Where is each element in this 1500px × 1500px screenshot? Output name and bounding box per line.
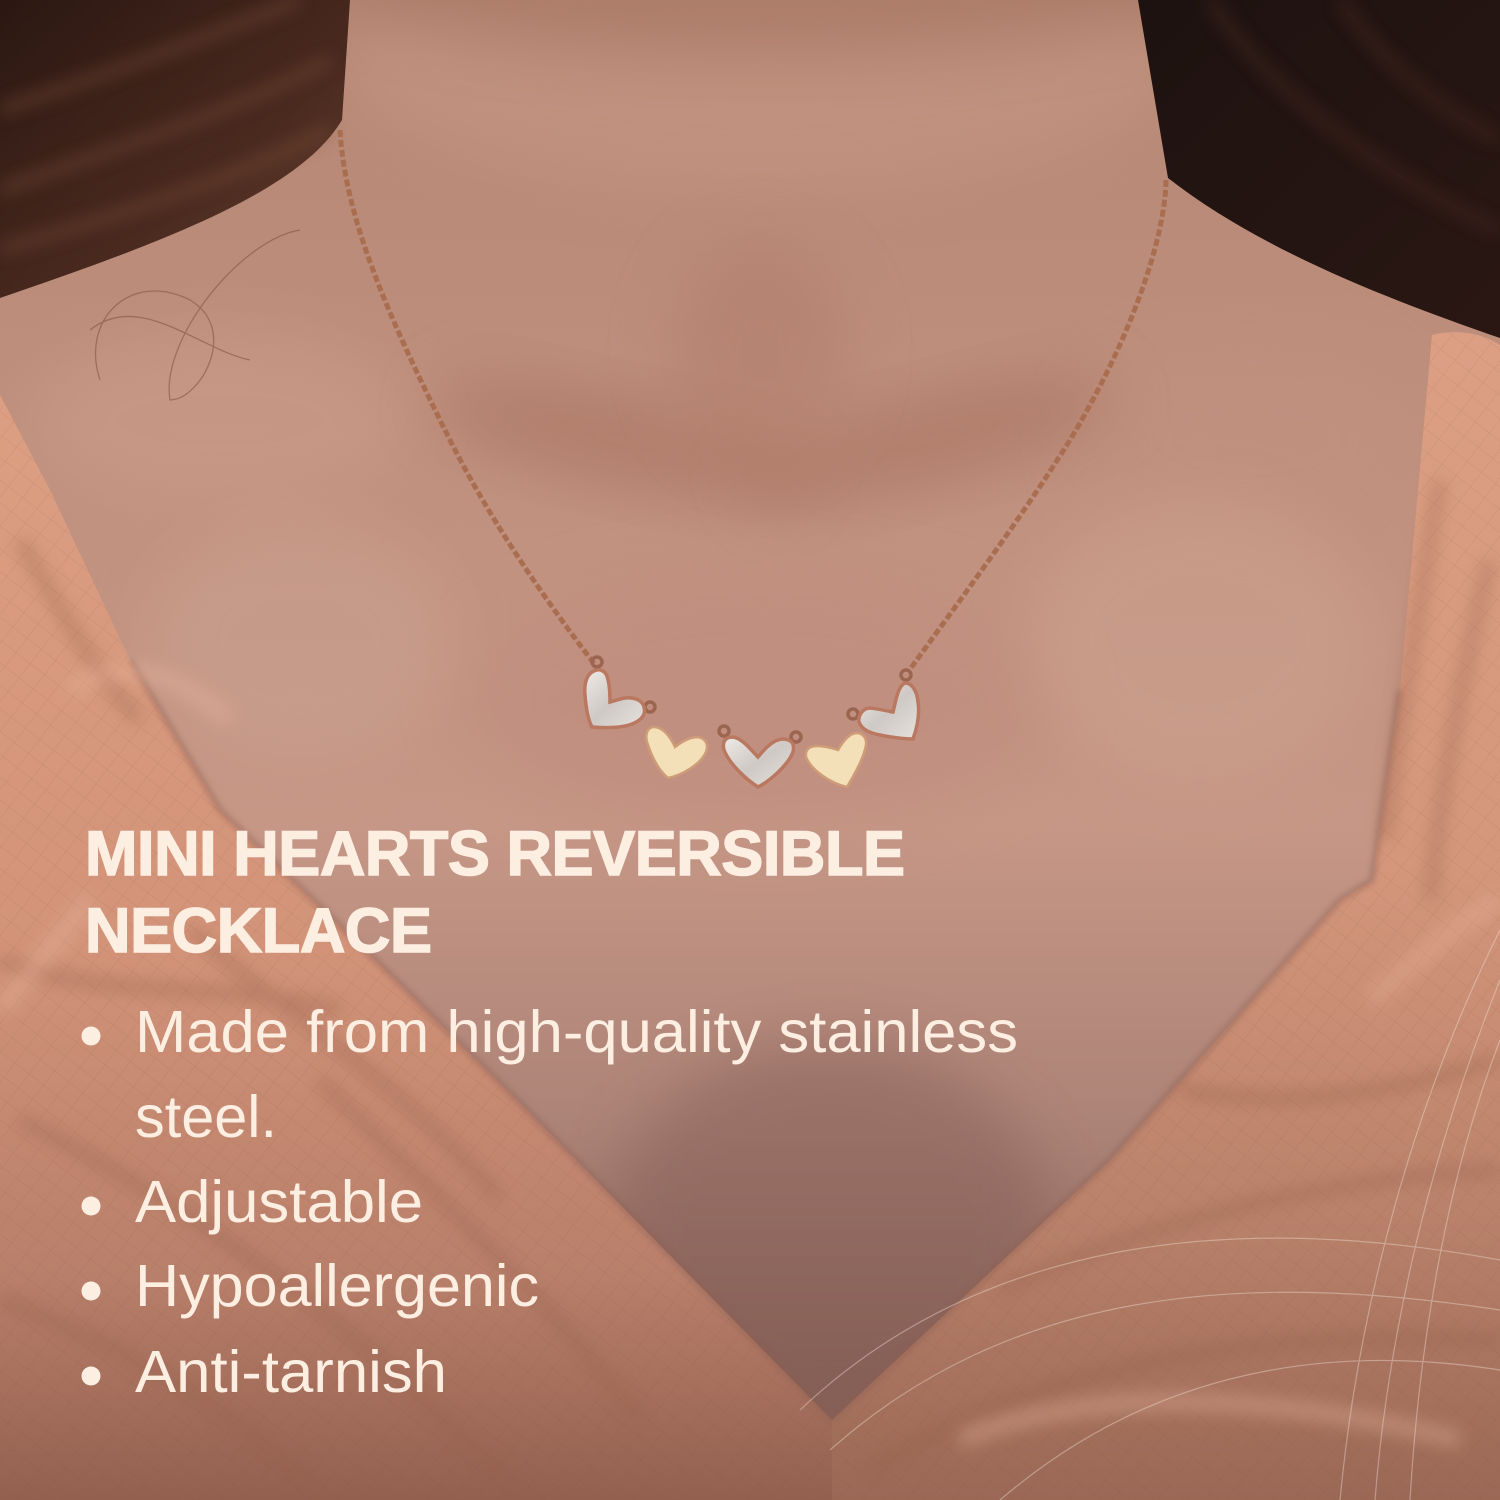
necklace pendant: five hearts: [585, 657, 919, 787]
heart 4: gold: [806, 733, 866, 787]
bullet: anti-tarnish: Anti-tarnish: [135, 1339, 447, 1405]
necklace chain: [340, 130, 1166, 672]
bullet: made from stainless steel: [82, 999, 1018, 1150]
title: [85, 819, 905, 966]
photo: blouse, right panel: [832, 332, 1500, 1500]
heart 5: pearl: [848, 670, 919, 739]
title: NECKLACE: [85, 896, 432, 966]
heart 3: pearl: [719, 726, 801, 787]
title: MINI HEARTS REVERSIBLE: [85, 819, 905, 889]
heart 1: pearl: [585, 657, 655, 728]
bullet: adjustable: Adjustable: [135, 1169, 423, 1235]
bullet: made from stainless steel: steel.: [135, 1084, 277, 1150]
photo: hair, right side: [1138, 0, 1500, 338]
photo: blouse, left panel: [0, 395, 832, 1500]
photo: hair, left side: [0, 0, 350, 400]
feature list: [82, 999, 1018, 1405]
decorative: fine white lines, lower right: [800, 930, 1500, 1500]
bullet: made from stainless steel: Made from high-quality stainless: [135, 999, 1018, 1065]
bullet: hypoallergenic: Hypoallergenic: [135, 1253, 539, 1319]
heart 2: gold: [646, 727, 707, 778]
